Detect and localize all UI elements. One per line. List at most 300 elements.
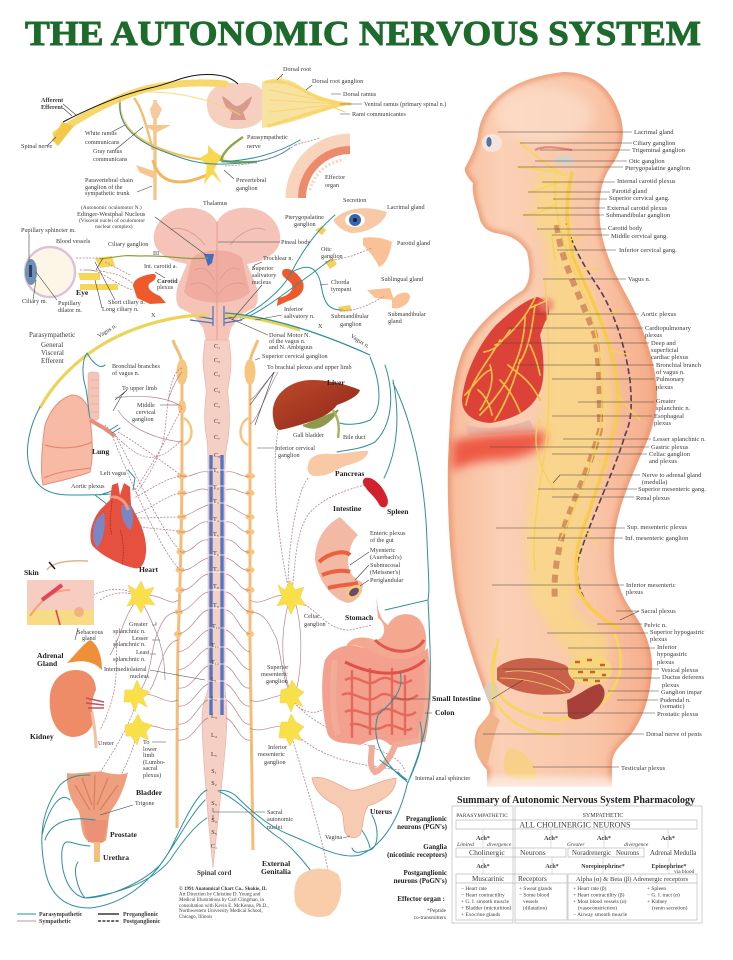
leader lines bbox=[483, 132, 660, 767]
effector lists bbox=[461, 885, 688, 918]
labels: body figure: Carotid body bbox=[608, 225, 643, 232]
labels: body figure: Cardiopulmonary bbox=[645, 325, 692, 332]
labels: right organs: Periglandular bbox=[370, 577, 403, 584]
labels: left organs: Least bbox=[136, 649, 150, 656]
effector lists: + Heart contractility (β) bbox=[573, 892, 625, 898]
effector lists: + Exocrine glands bbox=[461, 912, 500, 918]
labels: right organs: (Auerbach's) bbox=[370, 554, 402, 561]
legend: Postganglionic bbox=[123, 919, 161, 925]
effector lists: (renin secretion) bbox=[652, 904, 688, 912]
small intestine and colon bbox=[322, 646, 430, 772]
pink pleura patch bbox=[538, 298, 554, 312]
labels: left organs: Gland bbox=[37, 659, 58, 668]
segment labels: C₆ bbox=[214, 418, 220, 425]
labels: right organs: Small Intestine bbox=[432, 694, 481, 703]
labels: body figure: plexus bbox=[650, 636, 667, 643]
head highlight bbox=[497, 87, 593, 143]
labels: left organs: Heart bbox=[139, 565, 158, 574]
segment labels: C₈ bbox=[214, 452, 220, 459]
copyright credit bbox=[179, 886, 269, 920]
segment labels: T₂ bbox=[213, 484, 219, 491]
diaphragm bbox=[466, 420, 535, 436]
labels: cranial: Submandibular bbox=[388, 311, 426, 318]
labels: cranial: Vagus n. bbox=[349, 333, 371, 350]
labels: left organs: Ureter bbox=[98, 740, 114, 747]
labels: spinal diagram: Prevertebral bbox=[236, 177, 267, 184]
yellow nerve wash bbox=[525, 172, 615, 690]
panel: right organs bbox=[218, 357, 481, 921]
effector lists: − Some blood bbox=[519, 892, 550, 898]
labels: cranial: Thalamus bbox=[203, 200, 228, 207]
panel: spinal reflex diagram bbox=[21, 66, 446, 200]
neurotransmitter rows: via blood bbox=[674, 869, 695, 875]
skin bbox=[27, 561, 94, 625]
labels: body figure: plexus bbox=[657, 659, 674, 666]
labels: body figure: plexus bbox=[662, 682, 679, 689]
penis and testis bbox=[477, 712, 500, 763]
labels: body figure: Celiac ganglion bbox=[649, 451, 691, 458]
labels: body figure: Prostatic plexus bbox=[657, 711, 699, 718]
effector lists: + Kidney bbox=[647, 899, 668, 905]
segment labels: T₆ bbox=[213, 550, 219, 557]
labels: right organs: Submucosal bbox=[370, 562, 401, 569]
labels: spinal diagram: ganglion of the bbox=[85, 184, 123, 191]
labels: left organs: Lung bbox=[92, 447, 110, 456]
labels: left organs bbox=[24, 363, 205, 862]
labels: right organs: Myenteric bbox=[370, 547, 396, 554]
effector lists: + Heart rate (β) bbox=[573, 885, 607, 892]
icon: skin arrow bbox=[49, 562, 55, 569]
copyright credit: Chicago, Illinois bbox=[179, 915, 212, 920]
labels: right organs: ganglion bbox=[304, 621, 326, 628]
labels: cranial: (Autonomic oculomotor N.) bbox=[81, 204, 142, 211]
upper chain branches bbox=[115, 372, 182, 442]
labels: cranial: Ciliary m. bbox=[22, 298, 48, 305]
labels: cranial: ganglion bbox=[340, 321, 362, 328]
cranial nerve fibres bbox=[85, 215, 384, 320]
lung and trachea bbox=[42, 372, 115, 485]
labels: left organs: Aortic plexus bbox=[71, 483, 105, 490]
labels: body figure: Lesser splanchnic n. bbox=[653, 436, 706, 443]
labels: cranial: salivatory bbox=[252, 272, 277, 279]
labels: left organs: Intermediolateral bbox=[104, 666, 147, 673]
copyright credit: Northwestern University Medical School, bbox=[179, 909, 263, 914]
labels: left organs: limb bbox=[143, 752, 154, 759]
pterygopalatine ganglion bbox=[315, 226, 326, 235]
prostate bbox=[567, 684, 605, 719]
labels: body figure: Gastric plexus bbox=[651, 444, 689, 451]
nerve fibres to effector bbox=[120, 103, 300, 164]
segmental sympathetic connections bbox=[178, 472, 250, 740]
labels: spinal diagram: Efferent bbox=[41, 104, 64, 111]
neurotransmitter rows: Limited bbox=[456, 842, 474, 848]
labels: body figure: Inferior cervical gang. bbox=[619, 247, 677, 254]
labels: body figure: cardiac plexus bbox=[651, 354, 689, 361]
labels: left organs: ganglion bbox=[132, 416, 154, 423]
labels: body figure: Esophageal bbox=[654, 413, 684, 420]
segment labels: T₇ bbox=[213, 566, 219, 573]
labels: body figure: Lacrimal gland bbox=[634, 129, 674, 136]
labels: body figure: hypogastric bbox=[657, 651, 687, 658]
labels: body figure: Inf. mesenteric ganglion bbox=[625, 535, 689, 542]
labels: right organs: Vagina bbox=[325, 834, 342, 841]
body rim shading bbox=[448, 72, 657, 787]
labels: cranial: General bbox=[41, 341, 63, 349]
segment labels: T₁ bbox=[213, 467, 219, 474]
labels: right organs: Spleen bbox=[387, 507, 409, 516]
neurotransmitter rows: Ach* bbox=[476, 864, 490, 870]
neurotransmitter rows: Greater bbox=[567, 842, 585, 848]
labels: spinal diagram: Parasympathetic bbox=[247, 134, 288, 141]
labels: right organs: Uterus bbox=[370, 807, 392, 816]
neurotransmitter rows: Cholinergic bbox=[469, 848, 505, 857]
copyright credit: consultation with Kevin E. McKenna, Ph.D., bbox=[179, 904, 269, 909]
submandibular ganglion bbox=[338, 305, 352, 312]
external genitalia bbox=[294, 869, 341, 917]
effector lists: + Sweat glands bbox=[519, 886, 552, 892]
eye with ciliary body bbox=[25, 247, 75, 297]
copyright credit: Medical Illustrations by Carl Clingman, in bbox=[179, 898, 264, 903]
labels: cranial: Blood vessels bbox=[56, 238, 91, 245]
legend bbox=[17, 912, 161, 925]
carotid plexus left bbox=[133, 274, 166, 304]
labels: right organs: Liver bbox=[327, 378, 345, 387]
vagal fibres to abdominal organs bbox=[218, 357, 430, 885]
labels: left organs: To upper limb bbox=[122, 385, 157, 392]
labels: body figure: (somatic) bbox=[660, 703, 685, 710]
labels: body figure: Inferior mesenteric bbox=[626, 582, 676, 589]
labels: central column: mesenteric bbox=[258, 751, 285, 758]
table title: Summary of Autonomic Nervous System Pharmacology bbox=[457, 795, 696, 806]
labels: cranial: Parasympathetic bbox=[29, 331, 75, 339]
spinal nerve trunk bbox=[56, 83, 225, 134]
side labels of the pharmacology table: Preganglionic bbox=[406, 815, 447, 823]
labels: body figure: Ganglion impar bbox=[661, 689, 703, 696]
brain hemispheres and brainstem bbox=[154, 208, 280, 345]
midbrain and cerebellum bbox=[184, 250, 250, 302]
labels: cranial: Secretion bbox=[343, 197, 366, 204]
neurotransmitter rows: divergence bbox=[487, 842, 512, 848]
labels: cranial: Chorda bbox=[331, 279, 349, 286]
Edinger-Westphal nucleus bbox=[204, 254, 214, 266]
labels: left organs: Trigone bbox=[135, 800, 155, 807]
labels: cranial: gland bbox=[388, 318, 403, 325]
effector lists: + Bladder (micturition) bbox=[461, 904, 512, 912]
labels: body figure: Trigeminal ganglion bbox=[632, 147, 686, 154]
segment labels: L₄ bbox=[211, 732, 217, 739]
vagus nerve bands bbox=[40, 315, 207, 408]
table headers: ALL CHOLINERGIC NEURONS bbox=[519, 820, 631, 830]
labels: left organs: Bronchial branches bbox=[112, 363, 161, 370]
labels: body figure: splanchnic n. bbox=[656, 405, 691, 412]
labels: spinal diagram: Dorsal root bbox=[283, 66, 311, 73]
labels: spinal diagram: Paravertebral chain bbox=[85, 177, 133, 184]
labels: cranial: dilator m. bbox=[58, 307, 83, 314]
panel: pharmacology summary table bbox=[452, 795, 702, 923]
labels: spinal diagram: Effector bbox=[325, 174, 345, 181]
effector lists: + G. I. smooth muscle bbox=[461, 899, 510, 905]
spleen bbox=[363, 478, 388, 507]
prevertebral ganglion bbox=[200, 145, 225, 184]
labels: left organs: Middle bbox=[137, 402, 155, 409]
labels: body figure: Superior mesenteric gang. bbox=[638, 486, 706, 493]
grey matter bbox=[222, 96, 252, 120]
labels: right organs: Celiac bbox=[304, 613, 320, 620]
labels: spinal diagram: ganglion bbox=[236, 185, 258, 192]
labels: right organs: Colon bbox=[435, 708, 455, 717]
blue preganglionic columns bbox=[211, 455, 222, 715]
segment labels: T₃ bbox=[213, 498, 219, 505]
side labels of the pharmacology table bbox=[387, 815, 448, 921]
labels: body figure: Ciliary ganglion bbox=[633, 140, 676, 147]
labels: cranial: of the vagus n. bbox=[269, 338, 306, 345]
labels: cranial: Lacrimal gland bbox=[387, 204, 426, 211]
neurotransmitter rows: Neurons bbox=[616, 850, 639, 857]
labels: body figure: Vagus n. bbox=[628, 276, 651, 283]
labels: spinal diagram: nerve bbox=[247, 143, 261, 150]
labels: left organs: Urethra bbox=[103, 853, 129, 862]
heart bbox=[90, 483, 146, 568]
labels: body figure: Vesical plexus bbox=[661, 667, 699, 674]
ganglion stars bbox=[127, 581, 155, 613]
labels: body figure: plexus bbox=[645, 332, 662, 339]
labels: spinal diagram: Gray ramus bbox=[93, 148, 123, 155]
labels: left organs: Skin bbox=[24, 568, 40, 577]
pancreas bbox=[307, 451, 368, 476]
neurotransmitter rows: Ach* bbox=[476, 835, 490, 842]
facial nerve branches bbox=[517, 143, 565, 215]
labels: left organs: Sebaceous bbox=[77, 629, 104, 636]
segment labels: T₉ bbox=[213, 602, 219, 609]
labels: left organs: splanchnic n. bbox=[113, 628, 146, 635]
labels: spinal diagram: Dorsal root ganglion bbox=[312, 78, 363, 85]
pelvic yellow arc bbox=[492, 635, 621, 719]
labels: body figure: Bronchial branch bbox=[656, 362, 702, 369]
labels: central column: Superior cervical ganglion bbox=[262, 353, 328, 360]
labels: central column: Superior bbox=[267, 664, 288, 671]
labels: right organs: Genitalia bbox=[261, 867, 291, 876]
labels: left organs: To bbox=[143, 739, 149, 746]
labels: body figure: plexus bbox=[656, 384, 673, 391]
labels: cranial: Pupillary sphincter m. bbox=[21, 227, 76, 234]
sympathetic trunk and rami bbox=[153, 100, 157, 200]
labels: cranial: Edinger-Westphal Nucleus bbox=[77, 211, 146, 218]
segment labels: C₃ bbox=[214, 371, 220, 378]
labels: body figure: Parotid gland bbox=[612, 188, 648, 195]
panel: prevertebral ganglia bbox=[124, 580, 306, 746]
uterus and tubes bbox=[312, 777, 396, 838]
labels: left organs: (Lumbo- bbox=[143, 759, 165, 766]
side labels of the pharmacology table: *Peptide bbox=[427, 908, 447, 914]
chain ganglia bbox=[174, 359, 256, 637]
effector lists: + Spleen bbox=[647, 886, 666, 892]
segment labels: C₇ bbox=[214, 434, 220, 441]
labels: spinal diagram: sympathetic trunk bbox=[85, 190, 130, 197]
pulmonary nerve branching bbox=[465, 298, 540, 420]
labels: cranial: nuclear complex) bbox=[95, 223, 133, 230]
segment labels: T₅ bbox=[213, 531, 219, 538]
labels: cranial: Sublingual gland bbox=[381, 276, 424, 283]
labels: spinal diagram: communicans bbox=[93, 156, 128, 163]
side labels of the pharmacology table: neurons (PoGN's) bbox=[394, 877, 448, 885]
segment labels: T₄ bbox=[213, 516, 219, 523]
labels: cranial: Trochlear n. bbox=[263, 255, 293, 262]
intestine section with enteric plexus bbox=[315, 517, 365, 603]
table frames bbox=[452, 806, 702, 923]
labels: cranial: Visceral bbox=[41, 349, 64, 357]
labels: right organs: Pancreas bbox=[335, 469, 364, 478]
labels: body figure: and plexus bbox=[649, 458, 677, 465]
labels: left organs: Adrenal bbox=[37, 651, 63, 660]
effector lists: + Most blood vessels (α) bbox=[573, 898, 627, 905]
labels: left organs: plexus) bbox=[143, 772, 161, 779]
kidney with ureter bbox=[50, 670, 104, 748]
labels: cranial: Pterygopalatine bbox=[285, 214, 324, 221]
labels: central column: autonomic bbox=[267, 816, 293, 823]
parasympathetic nerve bbox=[221, 137, 257, 162]
neurotransmitter rows: Muscarinic bbox=[472, 875, 504, 883]
labels: left organs: nucleus bbox=[130, 673, 149, 680]
labels: spinal diagram: White ramus bbox=[85, 130, 117, 137]
labels: left organs: Prostate bbox=[110, 830, 137, 839]
labels: body figure: plexus bbox=[654, 420, 671, 427]
labels: cranial: Int. carotid a. bbox=[144, 263, 177, 270]
segment labels: S₅ bbox=[211, 829, 217, 836]
dorsal root ganglion and fan bbox=[262, 79, 350, 128]
labels: cranial: Otic bbox=[321, 246, 332, 253]
labels: spinal diagram: organ bbox=[325, 182, 339, 189]
yellow pelvic nerve strand bbox=[493, 640, 560, 735]
sympathetic chains bbox=[173, 340, 182, 828]
labels: left organs: lower bbox=[143, 746, 157, 753]
legend: Preganglionic bbox=[123, 912, 159, 918]
stomach bbox=[345, 596, 426, 663]
labels: cranial: Ciliary ganglion bbox=[108, 241, 148, 248]
labels: body figure: External carotid plexus bbox=[607, 205, 668, 212]
side labels of the pharmacology table: neurons (PGN's) bbox=[397, 823, 448, 831]
labels: body figure: superficial bbox=[651, 347, 679, 354]
labels: spinal diagram: Spinal nerve bbox=[21, 143, 52, 150]
effector lists: (vasoconstriction) bbox=[578, 904, 617, 912]
labels: cranial: III bbox=[153, 250, 159, 257]
segment labels: C₁ bbox=[214, 343, 220, 350]
labels: body figure: Superior cervical gang. bbox=[609, 195, 670, 202]
parotid gland bbox=[363, 237, 392, 267]
labels: central column bbox=[197, 353, 352, 877]
title: THE AUTONOMIC NERVOUS SYSTEM bbox=[25, 14, 701, 53]
labels: left organs: Bladder bbox=[136, 788, 163, 797]
pelvic plexus bbox=[568, 655, 612, 685]
segment labels: T₁₂ bbox=[211, 659, 219, 666]
panel: body figure bbox=[448, 72, 706, 790]
segment labels bbox=[211, 343, 220, 850]
carotid plexus right bbox=[277, 269, 304, 306]
labels: cranial: X bbox=[318, 323, 323, 330]
lung in red bbox=[462, 297, 549, 423]
neurotransmitter rows: Adrenal Medulla bbox=[650, 850, 696, 857]
labels: right organs: Intestine bbox=[333, 504, 362, 513]
neurotransmitter rows: Epinephrine* bbox=[651, 864, 687, 870]
labels: cranial: tympani bbox=[331, 286, 352, 293]
side labels of the pharmacology table: Ganglia bbox=[423, 843, 447, 851]
adrenal gland bbox=[67, 640, 102, 670]
labels: central column: ganglion bbox=[266, 678, 288, 685]
labels: left organs: cervical bbox=[136, 409, 156, 416]
segment labels: C₂ bbox=[214, 357, 220, 364]
effector organ bbox=[292, 140, 350, 198]
labels: left organs: splanchnic n. bbox=[113, 656, 146, 663]
sublingual and submandibular glands bbox=[367, 288, 410, 308]
labels: cranial: ganglion bbox=[294, 221, 316, 228]
neurotransmitter rows: Receptors bbox=[518, 875, 547, 883]
labels: body figure: Renal plexus bbox=[636, 495, 670, 502]
labels: cranial: X bbox=[151, 312, 156, 319]
labels: spinal diagram: Rami communicantes bbox=[352, 111, 406, 118]
labels: cranial: plexus bbox=[157, 284, 174, 291]
spinal cord body bbox=[202, 340, 231, 868]
panel: left organs bbox=[24, 353, 207, 908]
rectum and bladder bbox=[497, 658, 575, 695]
labels: spinal diagram: Afferent bbox=[41, 97, 64, 104]
labels: body figure: plexus bbox=[626, 589, 643, 596]
segment labels: T₁₀ bbox=[212, 623, 220, 630]
labels: body figure: Pterygopalatine ganglion bbox=[625, 165, 691, 172]
labels: right organs: Bile duct bbox=[343, 434, 366, 441]
labels: spinal diagram: Dorsal ramus bbox=[343, 91, 377, 98]
segment labels: L₁ bbox=[211, 676, 217, 683]
labels: body figure: Pudendal n. bbox=[660, 697, 691, 704]
body interior bbox=[448, 72, 657, 787]
labels: body figure: Sup. mesenteric plexus bbox=[627, 524, 688, 531]
labels: cranial: Carotid bbox=[157, 278, 178, 285]
labels: right organs: Stomach bbox=[345, 613, 374, 622]
labels: left organs: gland bbox=[82, 635, 97, 642]
labels: right organs: External bbox=[262, 859, 290, 868]
labels: body figure: Pelvic n. bbox=[644, 622, 667, 629]
labels: spinal diagram: Ventral ramus (primary spinal n.) bbox=[364, 101, 446, 108]
labels: body figure: Deep and bbox=[651, 340, 676, 347]
labels: left organs: of vagus n. bbox=[112, 370, 140, 377]
labels: right organs: (Meissner's) bbox=[370, 569, 400, 576]
table headers: PARASYMPATHETIC bbox=[456, 813, 508, 819]
labels: body figure: Greater bbox=[656, 398, 676, 405]
neurotransmitter rows: Ach* bbox=[544, 835, 558, 842]
cranial base red bbox=[535, 147, 572, 150]
labels: spinal diagram: communicans bbox=[85, 139, 120, 146]
main sympathetic nerve bbox=[567, 173, 619, 628]
labels: right organs: Internal anal sphincter bbox=[415, 775, 470, 782]
labels: body figure: Nerve to adrenal gland bbox=[642, 472, 702, 479]
upper abdominal organs bbox=[452, 432, 546, 472]
segment labels: L₃ bbox=[211, 713, 217, 720]
neurotransmitter rows: Ach* bbox=[597, 835, 611, 842]
labels: central column: Spinal cord bbox=[197, 869, 232, 877]
labels: body figure: of vagus n. bbox=[656, 369, 685, 376]
labels: central column: ganglion bbox=[264, 759, 286, 766]
spine vertebra band bbox=[555, 225, 600, 600]
dark posterior line bbox=[570, 234, 632, 598]
segment labels: S₂ bbox=[211, 780, 217, 787]
neurotransmitter rows: Norepinephrine* bbox=[581, 864, 625, 870]
segment labels: T₈ bbox=[213, 583, 219, 590]
labels: cranial: Short ciliary n. bbox=[108, 299, 145, 306]
labels: body figure: Testicular plexus bbox=[621, 765, 666, 772]
labels: body figure: Sacral plexus bbox=[641, 608, 676, 615]
labels: body figure: Submandibular ganglion bbox=[606, 212, 671, 219]
labels: cranial: Pupillary bbox=[58, 300, 82, 307]
side labels of the pharmacology table: co-transmitters bbox=[414, 915, 446, 921]
connections from chains to ganglia and organs bbox=[110, 595, 301, 730]
